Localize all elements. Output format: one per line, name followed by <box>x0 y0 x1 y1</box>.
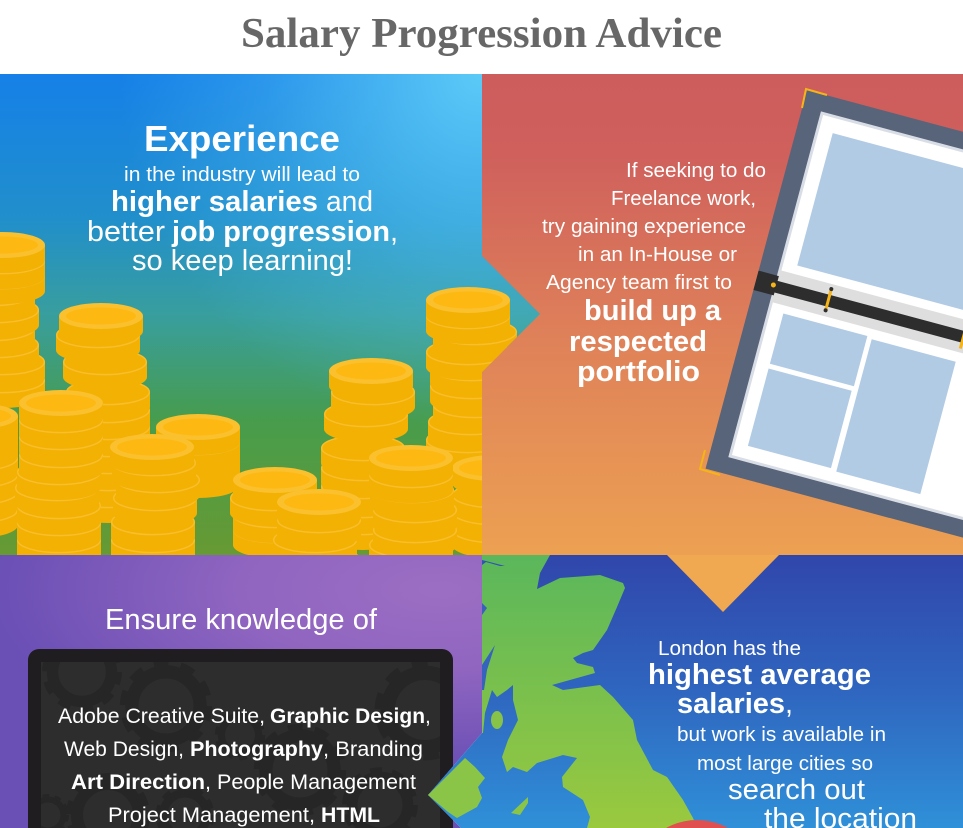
text: location message <box>648 638 917 828</box>
text: location message: but work is available in <box>677 724 886 746</box>
arrow: orange pointer <box>667 555 779 612</box>
text: freelance advice: portfolio <box>577 356 700 388</box>
text: skills list: Web Design, <box>64 738 184 761</box>
panel: skills <box>0 555 482 828</box>
text: experience message: Experience <box>144 118 340 159</box>
text: experience message <box>87 118 398 277</box>
text: experience message: so keep learning! <box>132 245 353 277</box>
text: skills list: Art Direction <box>71 771 205 794</box>
panel: location <box>428 555 963 828</box>
text: experience message: , <box>390 216 398 248</box>
text: freelance advice: Freelance work, <box>611 188 756 210</box>
text: skills list: , Branding <box>323 738 423 761</box>
text: location message: salaries <box>677 688 785 720</box>
text: location message: , <box>785 688 793 720</box>
text: skills list <box>58 705 431 827</box>
text: skills list: HTML <box>321 804 380 827</box>
map marker: London <box>633 820 761 828</box>
text: freelance advice: build up a <box>584 295 722 327</box>
heading: ensure knowledge: Ensure knowledge of <box>105 604 378 636</box>
text: experience message: job progression <box>171 216 390 248</box>
panel: experience <box>0 74 540 588</box>
text: experience message: and <box>326 186 373 218</box>
icon: laptop screen <box>28 649 453 828</box>
panel: portfolio <box>482 74 963 555</box>
text: freelance advice <box>542 160 766 388</box>
text: freelance advice: If seeking to do <box>626 160 766 182</box>
text: skills list: Graphic Design <box>270 705 425 728</box>
icon: coin stacks <box>0 232 518 555</box>
text: skills list: Adobe Creative Suite, <box>58 705 265 728</box>
text: experience message: higher salaries <box>111 186 318 218</box>
text: skills list: , People Management <box>205 771 416 794</box>
text: skills list: Photography <box>190 738 323 761</box>
icon: portfolio folder <box>698 88 963 538</box>
text: freelance advice: Agency team first to <box>546 272 732 294</box>
text: freelance advice: try gaining experience <box>542 216 746 238</box>
text: skills list: Project Management, <box>108 804 315 827</box>
text: location message: highest average <box>648 659 871 691</box>
text: location message: London has the <box>658 638 801 660</box>
text: freelance advice: respected <box>569 326 707 358</box>
text: location message: search out <box>728 774 865 806</box>
map: UK and Ireland <box>428 555 697 828</box>
title: Salary Progression Advice <box>241 11 722 57</box>
text: location message: most large cities so <box>697 753 873 775</box>
text: freelance advice: in an In-House or <box>578 244 737 266</box>
text: skills list: , <box>425 705 431 728</box>
text: experience message: better <box>87 216 165 248</box>
text: experience message: in the industry will lead to <box>124 164 360 186</box>
